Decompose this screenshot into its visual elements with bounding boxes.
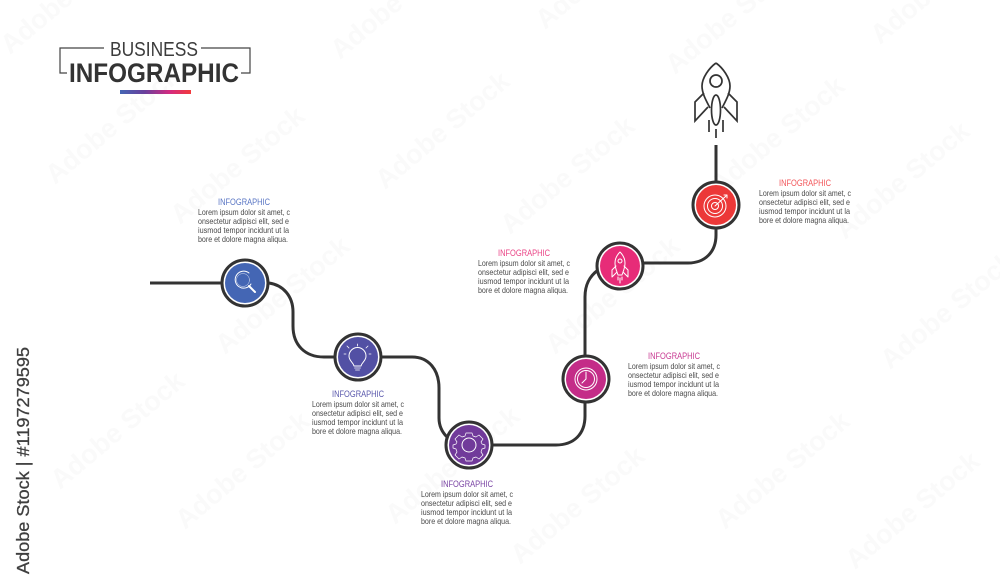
text: Adobe Stock (380, 400, 526, 530)
text block: step 4: Lorem ipsum dolor sit amet, c (628, 361, 720, 371)
node 1: search (222, 260, 268, 306)
title: business infographic (60, 39, 250, 94)
text: Adobe Stock (165, 100, 311, 230)
text: Adobe Stock (710, 405, 856, 535)
text block: step 5: INFOGRAPHIC (498, 248, 550, 258)
icon: clock (575, 368, 597, 390)
node 2: light bulb (335, 334, 381, 380)
text block: step 3: Lorem ipsum dolor sit amet, c (421, 489, 513, 499)
text block: step 1: iusmod tempor incidunt ut la (198, 225, 289, 235)
text block: step 1: bore et dolore magna aliqua. (198, 234, 288, 244)
text block: step 2: INFOGRAPHIC (332, 389, 384, 399)
text block: step 4: INFOGRAPHIC (648, 351, 700, 361)
text block: step 6: onsectetur adipisci elit, sed e (759, 197, 850, 207)
text block: step 6: bore et dolore magna aliqua. (759, 215, 849, 225)
text block: step 3: INFOGRAPHIC (441, 479, 493, 489)
text block: step 5: Lorem ipsum dolor sit amet, c (478, 258, 570, 268)
text block: step 6: Lorem ipsum dolor sit amet, c (759, 188, 851, 198)
text: Adobe Stock (840, 445, 986, 575)
text block: step 2: bore et dolore magna aliqua. (312, 426, 402, 436)
text block: step 2: onsectetur adipisci elit, sed e (312, 408, 403, 418)
text: Adobe Stock (210, 230, 356, 360)
text block: step 1: INFOGRAPHIC (218, 197, 270, 207)
text block: step 3: bore et dolore magna aliqua. (421, 516, 511, 526)
icon: rocket (695, 63, 737, 138)
stock id label: Adobe Stock | #1197279595 (13, 347, 33, 574)
text block: step 2: iusmod tempor incidunt ut la (312, 417, 403, 427)
text block: step 6: INFOGRAPHIC (779, 178, 831, 188)
text block: step 5 (478, 248, 570, 295)
text: Adobe Stock (45, 365, 191, 495)
text: Adobe Stock (495, 110, 641, 240)
timeline path (150, 145, 716, 445)
icon: magnifier (235, 271, 255, 292)
text: Adobe Stock (370, 65, 516, 195)
text block: step 2 (312, 389, 404, 436)
node 6: target (693, 182, 739, 228)
icon: target (704, 195, 727, 217)
text block: step 4: iusmod tempor incidunt ut la (628, 379, 719, 389)
text block: step 3: iusmod tempor incidunt ut la (421, 507, 512, 517)
text block: step 3 (421, 479, 513, 526)
text: Adobe Stock (170, 405, 316, 535)
node 5: rocket (597, 243, 643, 289)
icon: gear (453, 433, 485, 461)
node 4: clock (563, 356, 609, 402)
text block: step 1: onsectetur adipisci elit, sed e (198, 216, 289, 226)
text block: step 1 (198, 197, 290, 244)
title: business infographic: BUSINESS (110, 39, 198, 61)
text block: step 5: bore et dolore magna aliqua. (478, 285, 568, 295)
text: Adobe Stock (40, 60, 186, 190)
title: business infographic: INFOGRAPHIC (69, 58, 239, 88)
text block: step 4: bore et dolore magna aliqua. (628, 388, 718, 398)
text block: step 4: onsectetur adipisci elit, sed e (628, 370, 719, 380)
text block: step 3: onsectetur adipisci elit, sed e (421, 498, 512, 508)
node 3: gear (446, 422, 492, 468)
text: Adobe Stock (830, 115, 976, 245)
text block: step 6: iusmod tempor incidunt ut la (759, 206, 850, 216)
text block: step 5: onsectetur adipisci elit, sed e (478, 267, 569, 277)
icon: small rocket (612, 252, 628, 283)
text block: step 6 (759, 178, 851, 225)
text: Adobe Stock (540, 230, 686, 360)
text block: step 5: iusmod tempor incidunt ut la (478, 276, 569, 286)
icon: bulb (344, 344, 371, 370)
text block: step 4 (628, 351, 720, 398)
text: Adobe Stock (505, 440, 651, 570)
text block: step 2: Lorem ipsum dolor sit amet, c (312, 399, 404, 409)
text: Adobe Stock (705, 70, 851, 200)
text block: step 1: Lorem ipsum dolor sit amet, c (198, 207, 290, 217)
